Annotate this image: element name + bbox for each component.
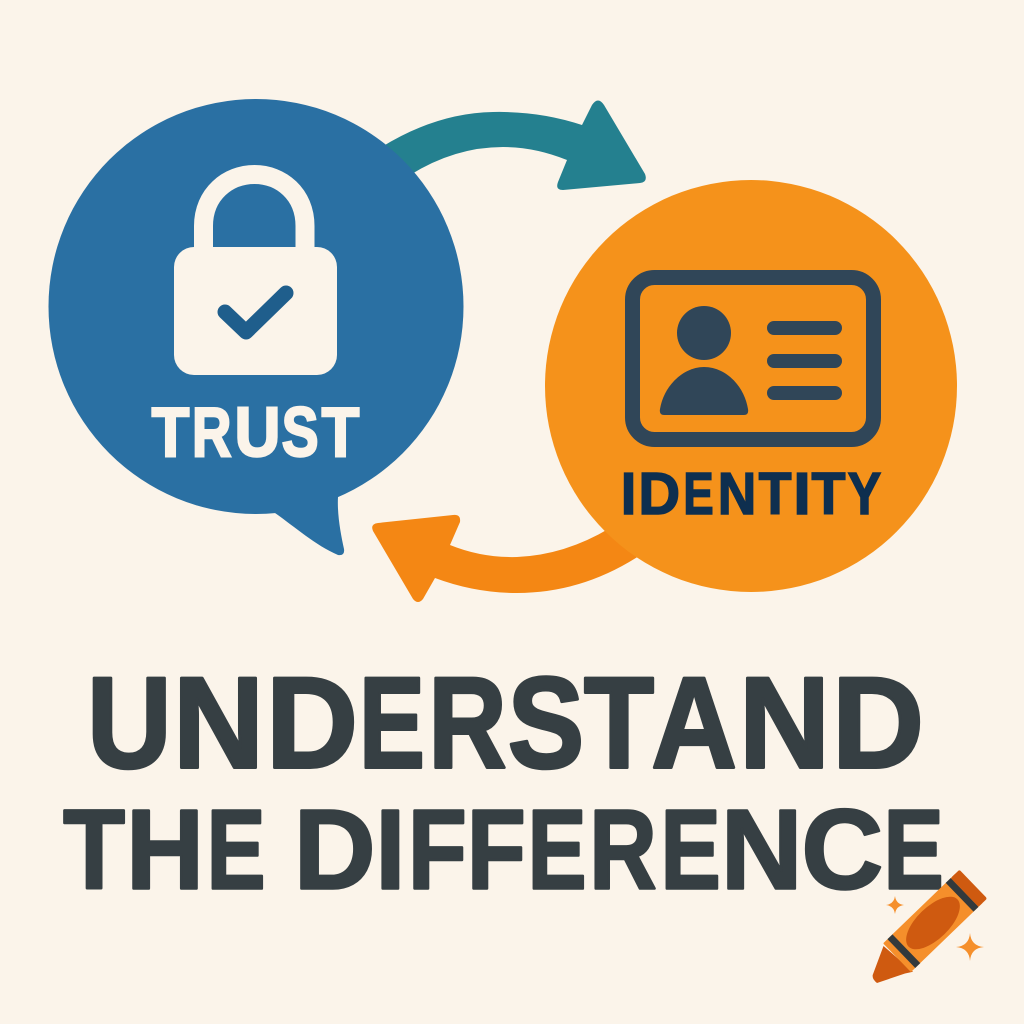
title line 1: U: [87, 651, 172, 796]
title line 1: R: [428, 651, 507, 796]
label: trust: T: [152, 392, 189, 471]
title line 1: A: [651, 651, 737, 796]
crayon tip: [873, 946, 913, 983]
title line 1: N: [173, 651, 264, 796]
title line 2: F: [467, 788, 526, 913]
title line 2: E: [884, 786, 944, 913]
bubble shape: [48, 99, 464, 555]
title line 2: E: [660, 786, 721, 913]
label: identity: T: [812, 462, 845, 528]
label: identity: I: [621, 462, 636, 528]
title line 1: S: [508, 650, 584, 795]
label: identity: N: [718, 461, 756, 527]
title line 2: E: [207, 787, 266, 913]
title line 2: F: [408, 788, 467, 913]
title line 1: D: [832, 650, 924, 796]
title line 2: I: [375, 787, 405, 913]
title: [63, 650, 944, 913]
icon: padlock with check: [174, 174, 337, 375]
label: identity: E: [683, 462, 714, 528]
title line 1: D: [266, 650, 358, 796]
label: identity: T: [759, 461, 792, 527]
title line 1: [87, 650, 924, 796]
label: identity: I: [793, 461, 811, 527]
arrow: orange identity to trust: [372, 515, 645, 602]
title line 2: C: [802, 787, 883, 913]
icon: crayon with sparkles: [873, 870, 987, 983]
title line 2: H: [126, 787, 204, 913]
sparkle large: [956, 933, 984, 961]
title line 2: N: [721, 787, 803, 913]
label: trust: U: [235, 394, 280, 472]
arrow: teal trust to identity: [380, 100, 646, 190]
label: trust: R: [192, 394, 231, 472]
title line 1: T: [584, 650, 654, 795]
title line 2: [63, 786, 944, 913]
title line 2: D: [294, 787, 376, 913]
label: trust: [152, 392, 359, 472]
title line 1: N: [739, 651, 830, 796]
label: identity: Y: [848, 460, 881, 527]
sparkle small: [886, 896, 904, 914]
panel: identity circle: [545, 180, 957, 592]
icon: id card: [632, 278, 874, 440]
crayon body: [883, 870, 987, 972]
label: trust: S: [282, 394, 319, 472]
title line 1: E: [359, 650, 425, 796]
title line 2: R: [589, 786, 657, 913]
circle shape: [545, 180, 957, 592]
label: trust: T: [322, 392, 359, 471]
label: identity: [621, 460, 881, 528]
title line 2: T: [63, 787, 125, 913]
title line 2: E: [528, 787, 587, 913]
label: identity: D: [638, 462, 680, 527]
panel: trust speech bubble: [48, 99, 464, 555]
